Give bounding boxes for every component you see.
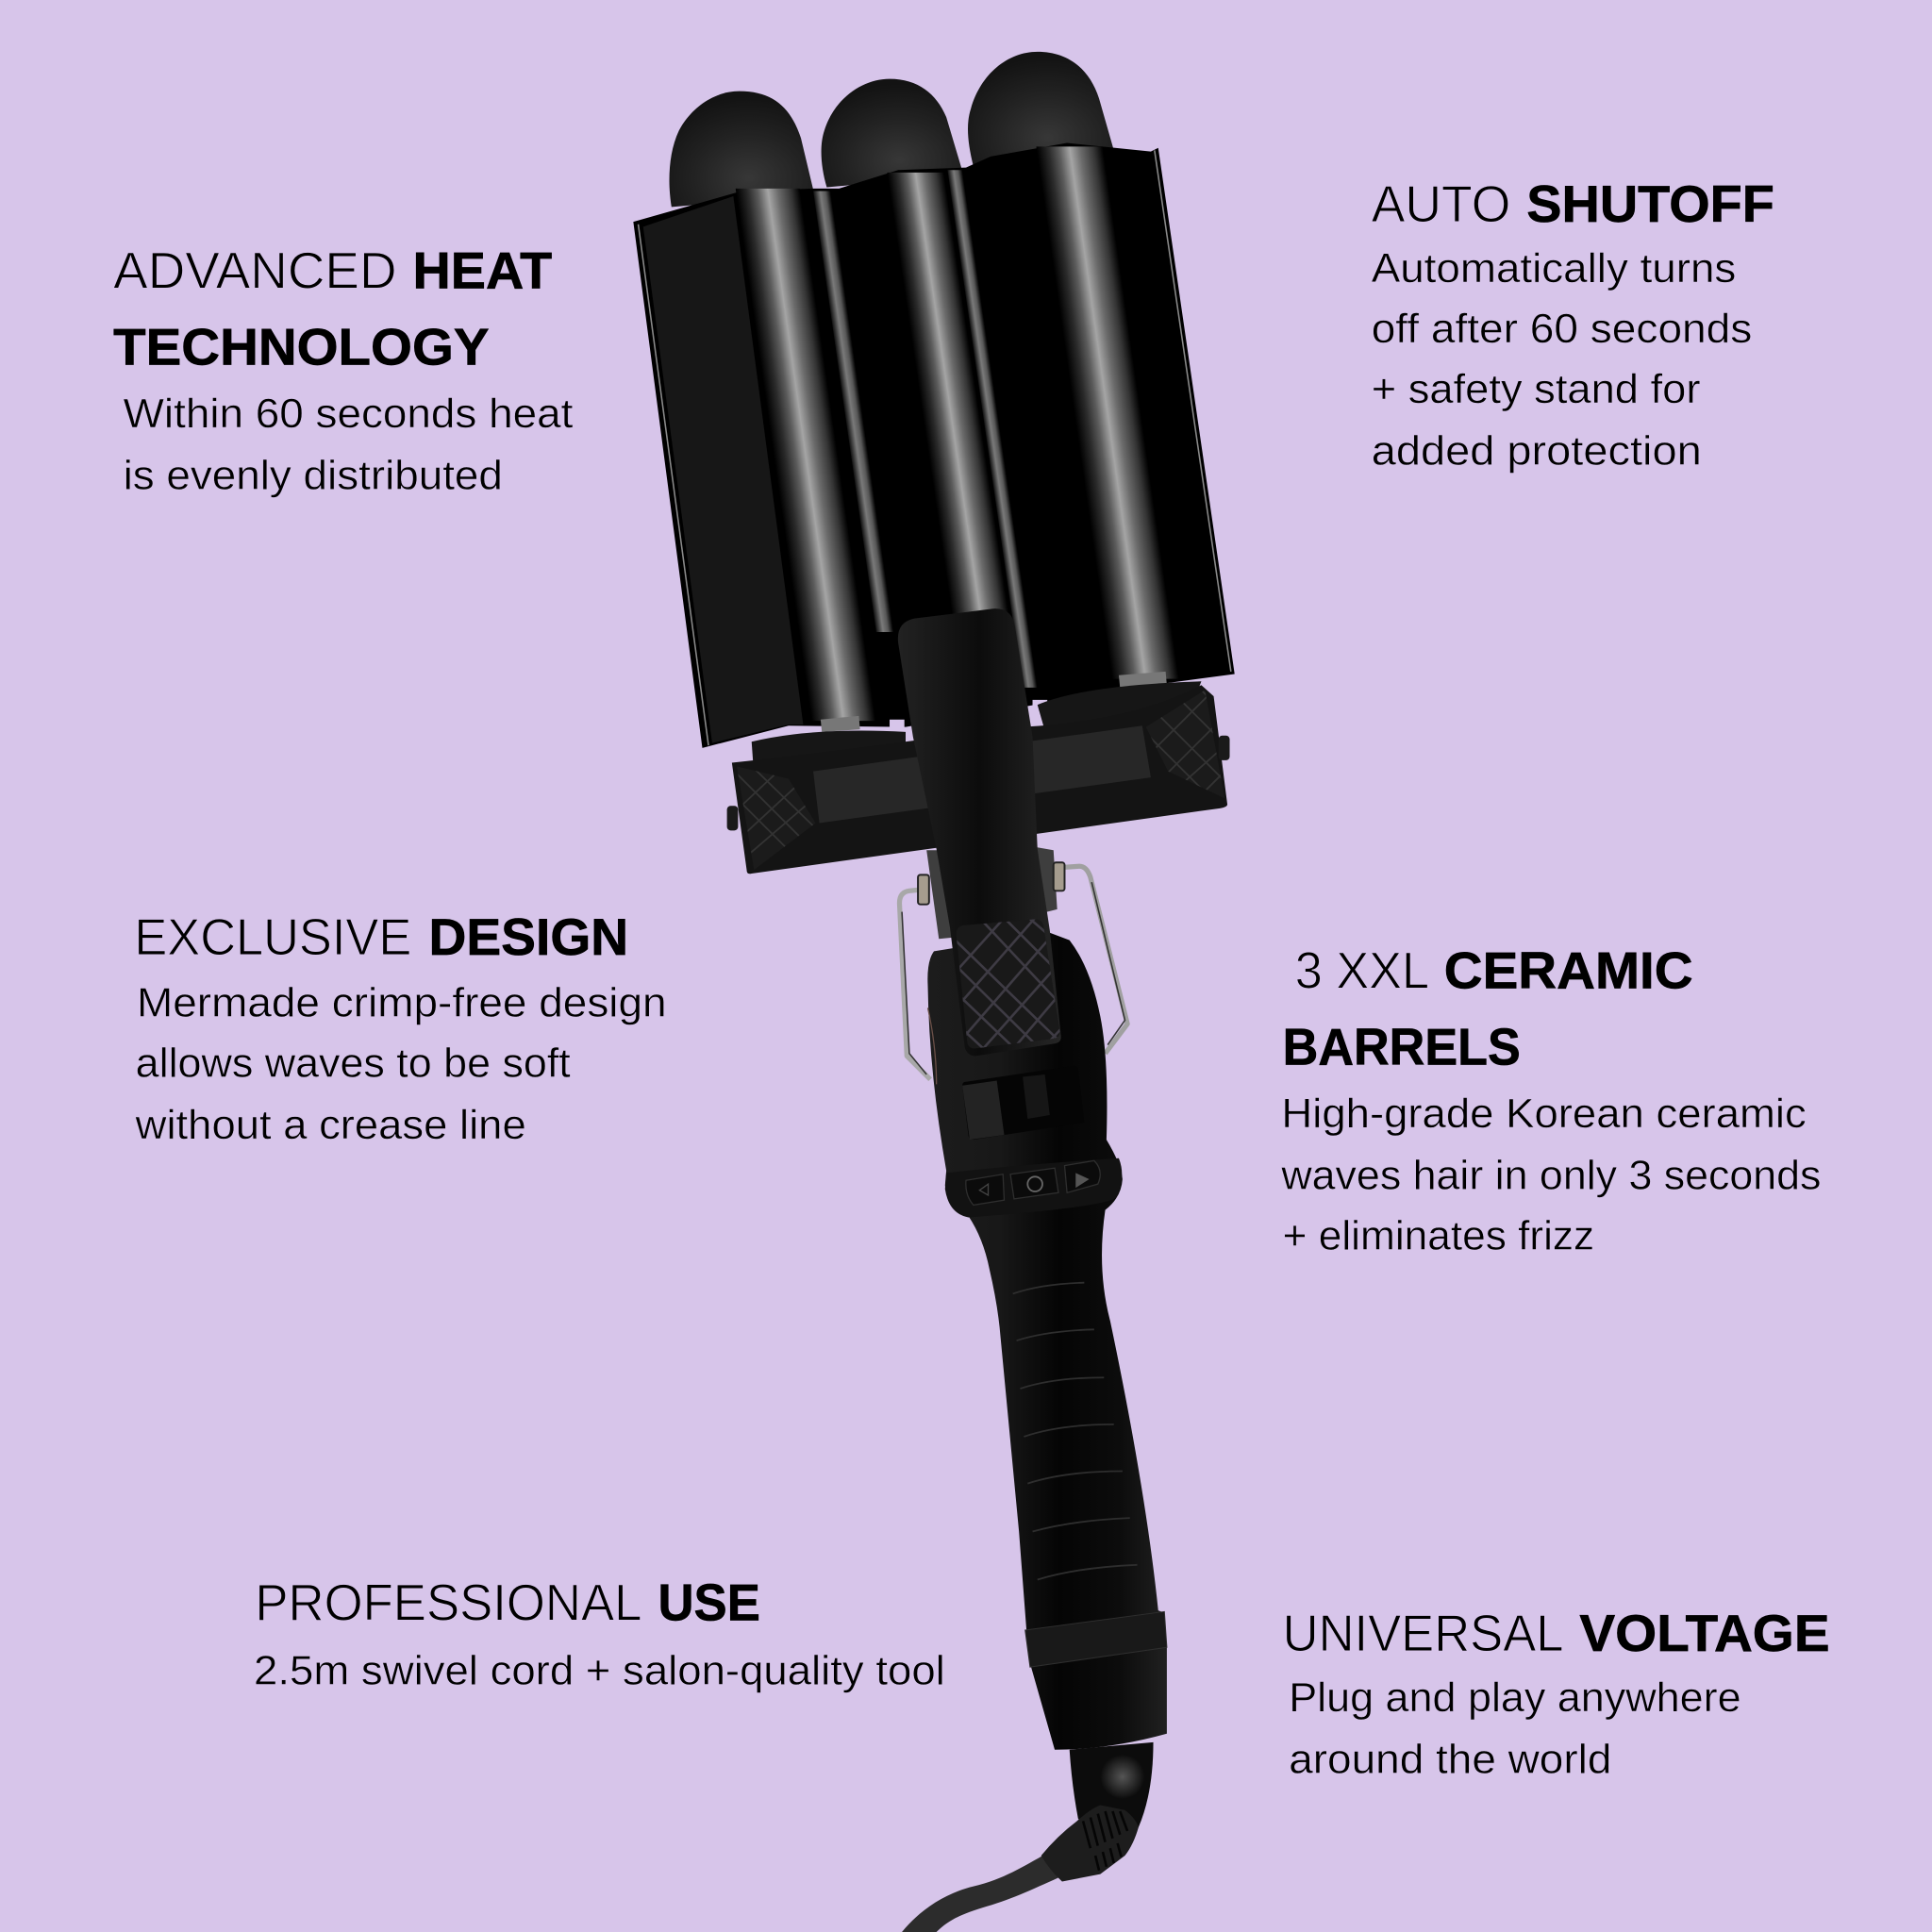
control buttons [966,1160,1100,1205]
heading: USE [658,1574,760,1632]
icon: barrel tips [669,52,1114,207]
heading: CERAMIC [1444,941,1693,1000]
text block [1372,246,1752,474]
handle body [927,933,1167,1750]
text block [1280,1091,1821,1258]
brand script [928,1008,937,1084]
heading [1283,941,1693,1075]
text block: Plug and play anywhere [1289,1675,1741,1721]
heading: ADVANCED [113,242,397,300]
text block: waves hair in only 3 seconds [1280,1153,1821,1198]
safety stand wire [899,862,1127,1079]
heading: DESIGN [429,908,628,966]
text block: + safety stand for [1372,367,1700,412]
collar [1025,1611,1167,1667]
barrel stems [821,716,860,732]
heading: BARRELS [1283,1017,1521,1075]
feature: universal voltage [1283,1604,1830,1783]
feature: exclusive design [134,908,667,1148]
left shield [643,193,818,743]
neck lever [898,608,1061,1056]
gaps [890,720,905,729]
text block: is evenly distributed [124,454,503,499]
diamond texture right [1151,691,1221,791]
grip pad lattice [957,919,1060,1049]
text block: + eliminates frizz [1283,1213,1594,1258]
wave base bar [727,677,1232,881]
text block: Within 60 seconds heat [124,391,573,437]
barrels and shields [633,143,1235,748]
heading: UNIVERSAL [1283,1604,1563,1662]
heading: SHUTOFF [1526,175,1774,233]
side strips [813,191,893,632]
feature: auto shutoff [1372,175,1774,474]
heading [134,908,628,966]
feature: professional use [254,1574,945,1693]
illustration: triple barrel hair waver [633,52,1235,1932]
text block: allows waves to be soft [136,1041,571,1087]
diamond texture left [738,771,813,853]
grip ticks [1013,1283,1138,1579]
side knobs [727,806,738,830]
text block: High-grade Korean ceramic [1281,1091,1807,1137]
text block [124,391,573,499]
heading: TECHNOLOGY [113,318,490,376]
cord [902,1853,1070,1932]
text block: Automatically turns [1372,246,1736,291]
stand bolts [918,874,929,905]
text block [1289,1675,1741,1783]
text block: 2.5m swivel cord + salon-quality tool [254,1648,945,1693]
barrel highlights [736,189,875,721]
text block [135,981,667,1148]
heading: 3 XXL [1295,941,1429,1000]
heading: AUTO [1372,175,1510,233]
text block: off after 60 seconds [1372,307,1752,352]
text block: without a crease line [135,1103,526,1148]
heading: EXCLUSIVE [134,908,411,966]
display screen [962,1066,1084,1140]
feature: ceramic barrels [1280,941,1821,1258]
text block: added protection [1372,428,1702,474]
feature: advanced heat technology [113,242,573,499]
heading [1372,175,1774,233]
heading [1283,1604,1830,1662]
metal bracket [926,845,1058,939]
heading: HEAT [413,242,552,300]
heading: PROFESSIONAL [255,1574,641,1632]
text block: around the world [1289,1738,1611,1783]
strain relief [1041,1742,1154,1881]
text block: Mermade crimp-free design [137,981,667,1026]
shield edge highlights [639,225,708,745]
heading: VOLTAGE [1579,1604,1830,1662]
control ring [945,1158,1122,1217]
heading [113,242,552,376]
